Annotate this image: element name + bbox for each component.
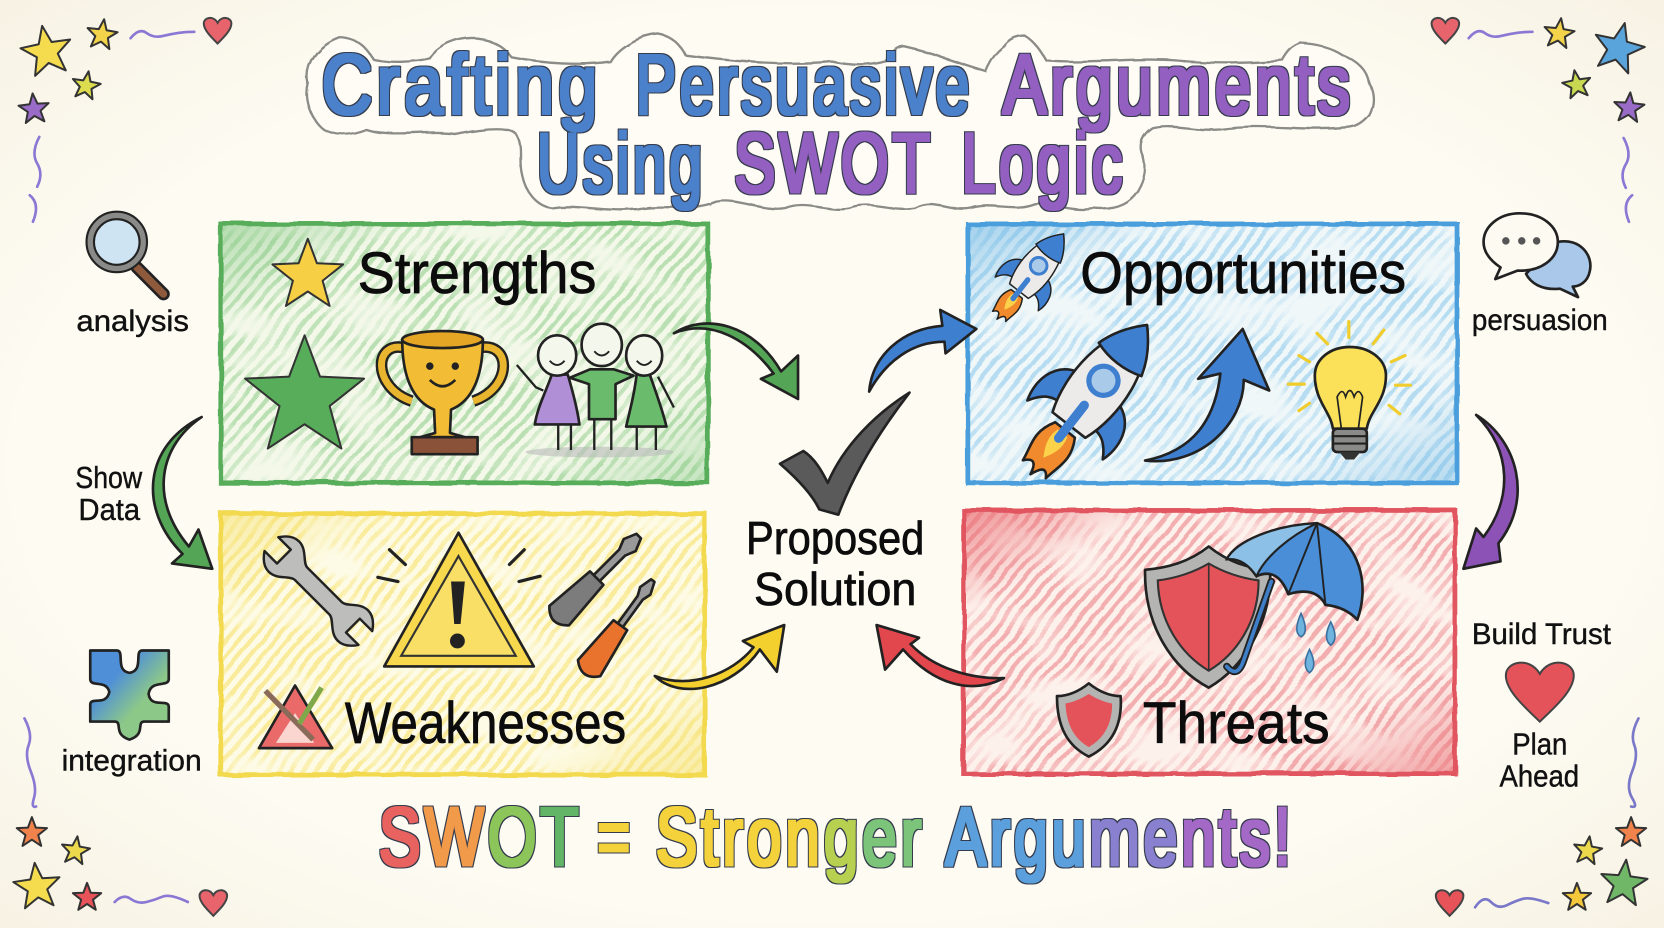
icon: small shield [1057,683,1121,757]
integration label: integration [62,744,202,777]
icon: small triangle with pencils [259,686,332,748]
show data label: Show [75,460,143,495]
strengths background [221,224,708,483]
weaknesses hatching [221,514,705,775]
plan ahead label [1499,726,1579,793]
tagline: SWOT [379,790,583,883]
icon: light bulb [1288,322,1410,459]
opportunities heading: Opportunities [1080,241,1406,306]
title text: SWOT [734,115,934,210]
opportunities corner shading [968,224,1457,483]
panel: opportunities [968,216,1457,505]
arrow: threats to solution [877,625,1004,686]
weaknesses background [221,514,705,775]
proposed solution label: Solution [754,563,916,615]
title text: Crafting [322,37,602,132]
panel: strengths [221,224,708,483]
threats heading: Threats [1143,691,1330,756]
opportunities frame [968,224,1457,483]
strengths hatching [221,224,708,483]
arrow: opportunities to threats [1463,415,1518,569]
icon: puzzle piece [90,651,169,740]
icon: gray screwdriver [544,526,648,631]
decoration: bottom left corner [12,718,227,916]
icon: speech bubbles [1484,213,1590,297]
icon: heart [1506,663,1574,722]
tagline [379,790,1295,883]
title text: Logic [961,115,1126,210]
threats hatching [964,510,1455,774]
opportunities background [968,224,1457,483]
build trust label: Build Trust [1472,618,1612,651]
proposed solution label: Proposed [746,512,924,564]
decoration: top left corner [17,17,231,222]
title banner [306,34,1373,210]
threats background [964,510,1455,774]
strengths frame [221,224,708,483]
icon: wrench [256,529,381,653]
title text: Using [537,115,706,210]
icon: magnifying glass [90,215,163,294]
decoration: bottom right corner [1436,718,1649,916]
icon: gold star [272,239,343,306]
weaknesses heading: Weaknesses [345,691,626,756]
plan ahead label: Plan [1512,726,1567,761]
show data label: Data [79,492,141,527]
icon: orange screwdriver [574,572,664,682]
icon: umbrella with drops [1227,523,1363,673]
opportunities hatching [968,224,1457,483]
threats frame [964,510,1455,774]
arrow: strengths to solution [674,324,798,399]
icon: three smiling people [517,324,674,457]
icon: big rocket [990,294,1187,505]
tagline: = [597,790,634,883]
weaknesses corner shading [221,514,705,775]
panel: weaknesses [221,514,705,775]
title text: Arguments [1003,37,1354,132]
arrow: solution to opportunities [869,310,976,392]
strengths corner shading [221,224,708,483]
icon: warning triangle [378,533,540,666]
title text: Persuasive [636,37,973,132]
panel: threats [964,510,1455,774]
title text [322,37,1354,210]
icon: green star [245,335,364,449]
arrow: strengths to weaknesses [153,417,212,569]
arrow: weaknesses to solution [655,625,784,689]
threats corner shading [964,510,1455,774]
plan ahead label: Ahead [1499,758,1579,793]
tagline: Stronger [656,790,925,883]
weaknesses frame [221,514,705,775]
decoration: top right corner [1432,16,1649,222]
strengths heading: Strengths [358,241,596,306]
analysis label: analysis [76,305,189,338]
icon: rising arrow [1145,329,1269,461]
icon: trophy [382,331,503,454]
title cloud outline [306,34,1373,210]
icon: check mark [780,393,909,515]
tagline: Arguments! [946,790,1295,883]
show data label [75,460,143,527]
icon: small rocket [974,216,1086,337]
icon: large shield [1145,547,1270,688]
persuasion label: persuasion [1472,304,1608,337]
